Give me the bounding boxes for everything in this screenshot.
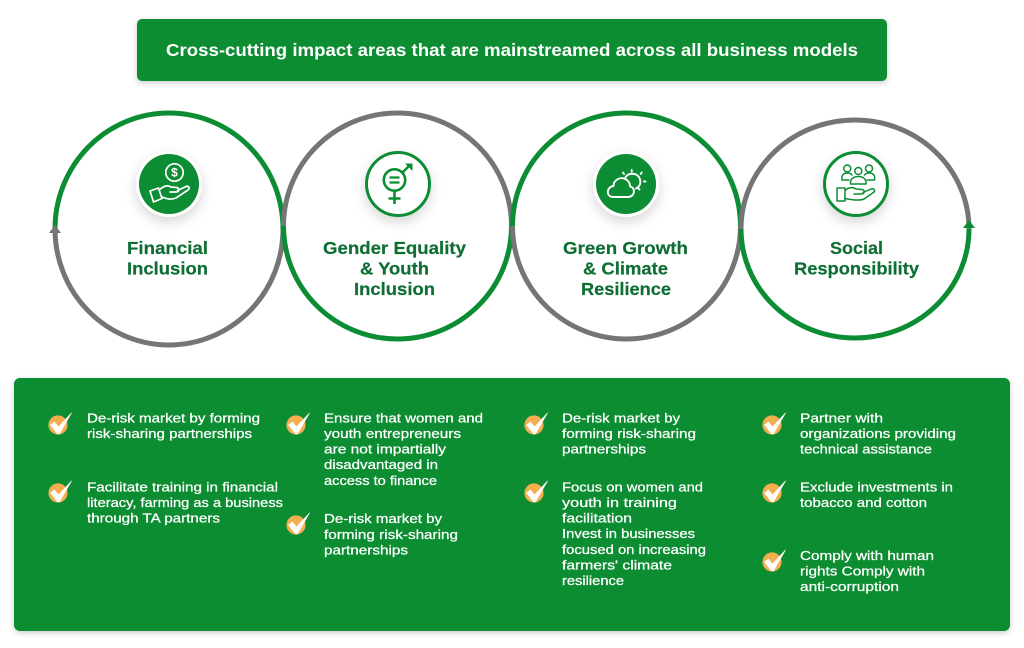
label: Social Responsibility: Responsibility [794, 258, 919, 278]
column: Social Responsibility actions: Comply with human [800, 548, 934, 563]
column: Social Responsibility actions: rights Comply with [800, 564, 925, 578]
title banner: Cross-cutting impact areas that are mainstreamed across all business models [166, 40, 858, 60]
title banner [137, 19, 887, 81]
panel: green details panel [14, 378, 1010, 631]
label: Social Responsibility: Social [830, 238, 883, 258]
column: Gender Equality actions: forming risk-sharing [324, 527, 458, 542]
column: Green Growth actions: youth in training [562, 495, 677, 510]
panel: Gender Equality circle [284, 113, 512, 339]
label: Gender Equality & Youth Inclusion: Inclusion [354, 279, 435, 299]
panel: Social Responsibility circle [741, 120, 975, 338]
column: Green Growth actions: forming risk-sharing [562, 426, 696, 441]
column: Gender Equality actions: access to finance [324, 473, 437, 488]
label: Green Growth & Climate Resilience: Green Growth [563, 238, 688, 258]
label: Financial Inclusion [127, 238, 208, 278]
column: Gender Equality actions: partnerships [324, 542, 408, 558]
column: Social Responsibility actions: Exclude investments in [800, 480, 953, 494]
column: Green Growth actions: De-risk market by [562, 410, 680, 426]
column: Social Responsibility actions: tobacco and cotton [800, 495, 927, 510]
column: Social Responsibility actions [762, 410, 956, 594]
icon: hand with coin [136, 151, 202, 217]
column: Green Growth actions: Invest in businesses [562, 526, 695, 541]
column: Financial Inclusion actions: literacy, farming as a business [87, 495, 283, 510]
column: Green Growth actions: facilitation [562, 510, 632, 526]
label: Gender Equality & Youth Inclusion: Gender Equality [323, 238, 466, 258]
column: Gender Equality actions [286, 410, 483, 558]
label: Green Growth & Climate Resilience: Resilience [581, 279, 671, 299]
label: Financial Inclusion: Inclusion [127, 258, 208, 278]
column: Financial Inclusion actions: through TA partners [87, 510, 220, 526]
icon: gender equality symbol [365, 151, 431, 217]
column: Financial Inclusion actions [48, 410, 283, 526]
icon: hand with coin: $ [171, 166, 178, 180]
column: Green Growth actions: focused on increasing [562, 542, 706, 557]
column: Social Responsibility actions: anti-corruption [800, 579, 899, 594]
column: Gender Equality actions: disadvantaged in [324, 457, 438, 472]
label: Social Responsibility [794, 238, 919, 278]
arc ring: green growth [512, 113, 740, 339]
icon: cloud and sun [593, 151, 659, 217]
column: Gender Equality actions: are not impartially [324, 442, 446, 456]
arc ring: social responsibility [741, 120, 975, 338]
arc ring: gender equality [284, 113, 512, 339]
label: Green Growth & Climate Resilience [563, 238, 688, 299]
column: Gender Equality actions: De-risk market by [324, 511, 442, 526]
label: Financial Inclusion: Financial [127, 238, 208, 258]
column: Green Growth actions: farmers' climate [562, 558, 672, 572]
label: Gender Equality & Youth Inclusion: & Youth [360, 258, 429, 278]
label: Green Growth & Climate Resilience: & Climate [583, 258, 668, 278]
column: Gender Equality actions: Ensure that women and [324, 410, 483, 426]
column: Green Growth actions: Focus on women and [562, 480, 703, 494]
panel: Green Growth circle [512, 113, 740, 339]
column: Financial Inclusion actions: risk-sharing partnerships [87, 426, 252, 441]
column: Financial Inclusion actions: Facilitate training in financial [87, 480, 278, 494]
column: Social Responsibility actions: Partner with [800, 410, 883, 426]
panel: Financial Inclusion circle [49, 113, 283, 345]
arc ring: financial inclusion [49, 113, 283, 345]
column: Green Growth actions: resilience [562, 573, 624, 588]
icon: hand with people [823, 151, 889, 217]
column: Social Responsibility actions: technical assistance [800, 442, 932, 456]
column: Social Responsibility actions: organizations providing [800, 426, 956, 441]
label: Gender Equality & Youth Inclusion [323, 238, 466, 299]
column: Gender Equality actions: youth entrepreneurs [324, 426, 461, 441]
column: Financial Inclusion actions: De-risk market by forming [87, 410, 260, 426]
column: Green Growth actions: partnerships [562, 442, 646, 456]
column: Green Growth actions [524, 410, 706, 588]
